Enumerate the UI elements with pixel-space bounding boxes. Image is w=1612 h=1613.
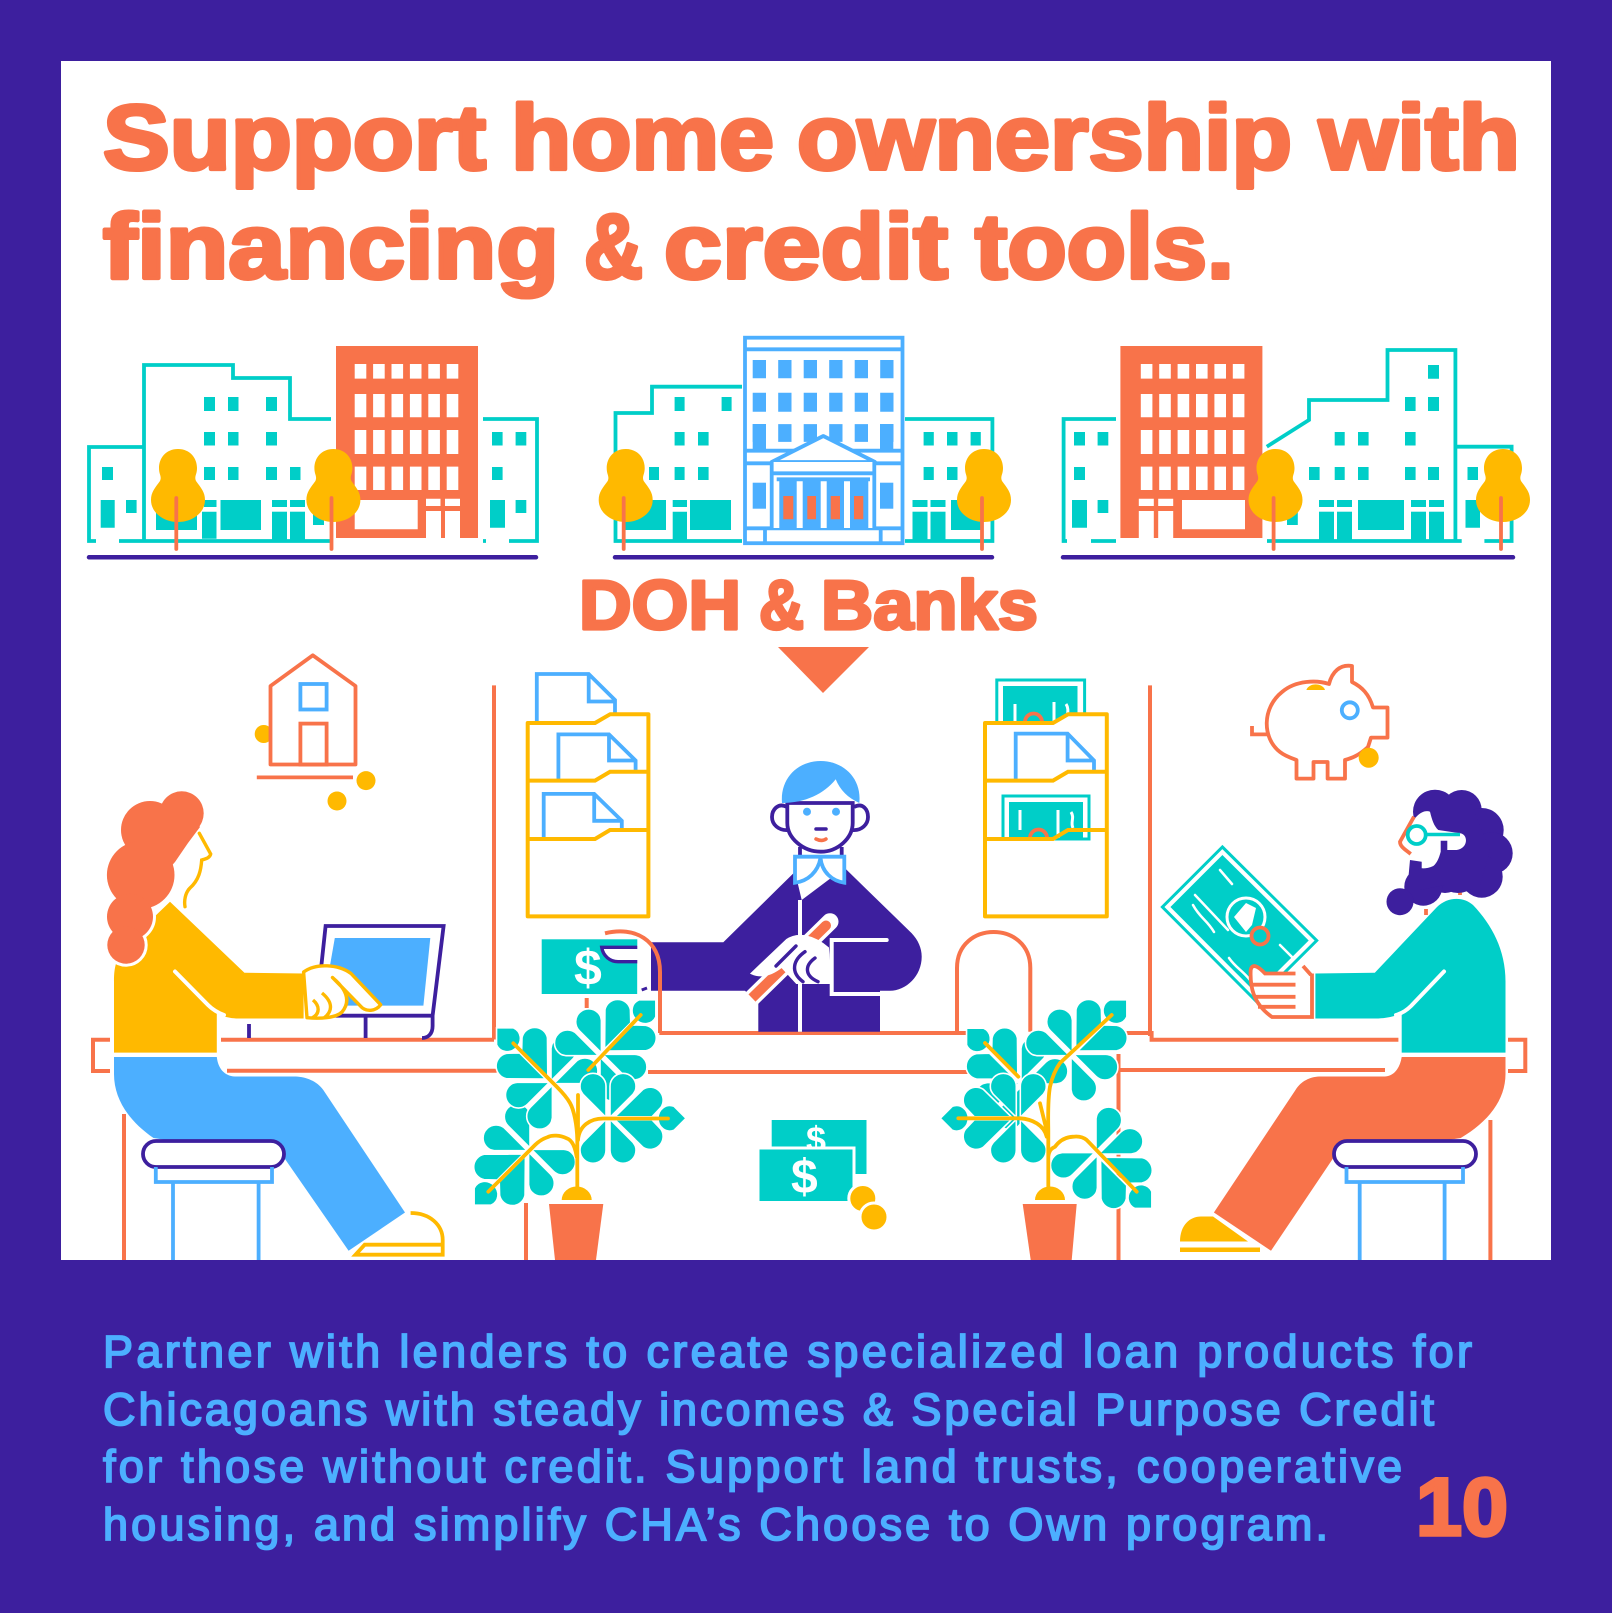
folders with documents, left [528,674,648,916]
hand on pencil [752,936,830,983]
stool [143,1141,284,1260]
person: woman with laptop [107,791,444,1260]
folders with money and document, right [985,680,1107,916]
ears [772,805,868,830]
document 3 [544,794,622,838]
plant left [442,968,688,1260]
heading: DOH & Banks: Banks [821,566,1038,644]
pot [549,1204,603,1260]
face line [185,833,211,907]
face [787,803,853,852]
folder stack [985,714,1107,916]
body text [103,1326,1472,1550]
hand [1251,966,1312,1017]
banknote 2 [1003,796,1089,839]
document [1016,734,1094,780]
right building cluster [1063,346,1530,557]
body text: for those without credit. Support land trusts, cooperative [103,1441,1402,1492]
person: banker at counter [651,761,922,1032]
title: & [584,196,643,298]
body text: Partner with lenders to create specialized loan products for [103,1326,1472,1377]
laptop [249,926,444,1038]
folder divider 3 [985,830,1107,839]
center building cluster with bank [599,338,1011,557]
glasses [1425,833,1460,836]
folder divider 3 [528,830,648,839]
left building cluster [89,346,537,557]
title: ownership [797,87,1292,189]
bank building [745,338,902,544]
body text: housing, and simplify CHA’s Choose to Own program. [103,1499,1328,1550]
banknote held by banker: $ [574,940,602,996]
arrow pointing down [778,647,869,693]
icon: piggy bank [1252,666,1388,779]
hair [782,761,860,803]
white panel [61,61,1551,1260]
eyes, nose, mouth [803,808,840,840]
document 1 [537,674,615,723]
folder divider 2 [985,772,1107,781]
heading: DOH & Banks [579,566,1038,644]
nose [1400,817,1414,854]
icon: house [255,655,376,810]
person: man reading money [1162,790,1513,1260]
title: Support [103,87,486,189]
banknote [1162,847,1317,1001]
pants [114,1057,405,1251]
title: tools. [975,196,1234,298]
hand on laptop [304,966,381,1018]
hair [107,791,204,964]
bow tie [795,857,844,883]
cash stack and coins: $ [791,1151,818,1204]
banknote held by banker [542,931,660,1033]
shoe [1180,1216,1260,1252]
title [103,87,1520,298]
shoe [356,1213,443,1255]
counter and walls [93,685,1525,1260]
document 2 [558,734,636,780]
title: financing [103,196,559,298]
shirt [114,902,304,1053]
cash stack and coins [758,1119,888,1231]
title: with [1318,87,1520,189]
jacket [651,868,922,1032]
folder divider 2 [528,772,648,781]
face [1405,811,1466,868]
body text: Chicagoans with steady incomes & Special Purpose Credit [103,1384,1434,1435]
stool [1334,1141,1476,1260]
folder stack [528,714,648,916]
pot [1023,1204,1077,1260]
page number: 10 [1416,1462,1508,1553]
pencil [752,920,831,998]
heading: DOH & Banks: DOH [579,566,741,644]
title: credit [664,196,948,298]
banknote 1 [997,680,1085,725]
plant right [935,968,1184,1260]
pants [1214,1057,1506,1251]
neck [800,847,842,857]
heading: DOH & Banks: & [759,566,804,644]
title: home [511,87,774,189]
shirt [1315,899,1506,1053]
cash stack and coins: $ [806,1119,826,1160]
hair and beard [1386,790,1513,915]
